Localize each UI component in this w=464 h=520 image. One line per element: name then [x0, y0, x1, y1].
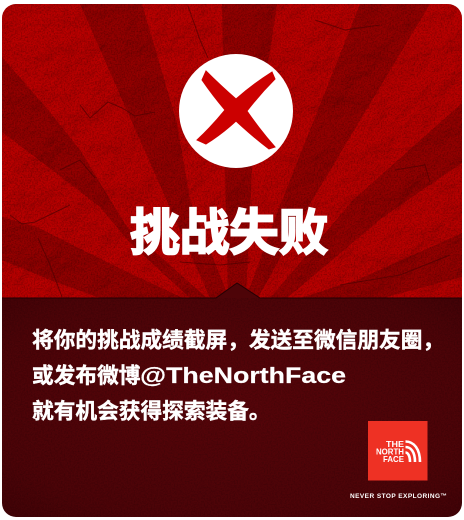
- icon: failure cross in circle: [179, 54, 293, 168]
- text block: instructions: 就有机会获得探索装备。: [32, 398, 271, 424]
- rock cracks: [10, 6, 450, 297]
- text block: instructions: 将你的挑战成绩截屏，发送至微信朋友圈，: [32, 328, 444, 352]
- panel: red sunburst background: [2, 4, 462, 300]
- title: 挑战失败: [130, 205, 328, 261]
- logo dome arcs: [406, 442, 420, 462]
- logo: The North Face: FACE: [383, 454, 404, 464]
- text block: instructions: [32, 328, 444, 424]
- panel: dark maroon footer: [2, 283, 462, 520]
- rock texture relief: [2, 4, 462, 300]
- sunburst rays: [2, 4, 462, 298]
- logo: The North Face: NORTH: [376, 446, 404, 456]
- logo: The North Face: [368, 421, 428, 480]
- logo: The North Face: THE: [386, 439, 404, 449]
- text block: instructions: @TheNorthFace: [140, 363, 346, 388]
- tagline: NEVER STOP EXPLORING™: [350, 493, 447, 500]
- text block: instructions: 或发布微博: [32, 363, 141, 388]
- grain: [2, 4, 462, 300]
